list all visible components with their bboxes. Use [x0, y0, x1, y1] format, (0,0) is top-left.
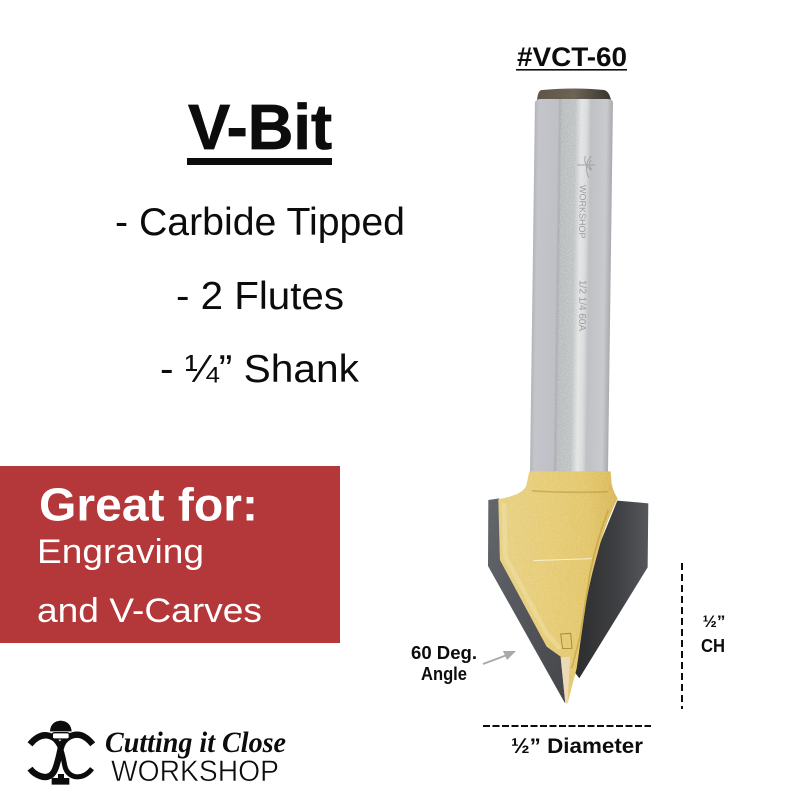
logo icon	[30, 721, 93, 785]
dimension label: half inch CH: ½”	[703, 612, 725, 631]
shank engraving: 1/2 1/4 60A	[576, 280, 588, 331]
right carbide wing	[572, 501, 648, 678]
title: V-Bit: V-Bit	[188, 91, 332, 163]
logo	[30, 721, 286, 788]
gold body	[498, 471, 618, 703]
text: engraving: Engraving	[37, 533, 204, 571]
gold shading	[532, 491, 608, 668]
feature: 2 flutes: - 2 Flutes	[176, 275, 344, 318]
angle label: 60 Deg.	[411, 643, 477, 663]
carbide tip	[561, 657, 570, 703]
heading: great for: Great for:	[39, 478, 258, 530]
dimension label: half inch CH	[701, 612, 725, 656]
dimension line: cutting height	[681, 563, 683, 709]
shank	[530, 88, 613, 473]
angle label: Angle	[421, 664, 467, 684]
feature: carbide tipped: - Carbide Tipped	[115, 201, 405, 244]
dimension label: half inch CH: CH	[701, 636, 725, 656]
arrow: to angle	[483, 651, 516, 664]
logo wordmark: workshop: WORKSHOP	[111, 755, 279, 788]
shank engraving	[575, 156, 595, 331]
left carbide wing	[488, 498, 567, 703]
dimension label: half inch diameter: ½” Diameter	[511, 735, 643, 758]
carbide and gold head	[488, 471, 648, 703]
product code: #VCT-60	[517, 42, 627, 72]
feature: quarter inch shank: - ¼” Shank	[160, 348, 360, 391]
logo wordmark: cutting it close: Cutting it Close	[105, 726, 286, 759]
dimension line: diameter	[483, 725, 651, 727]
angle label	[411, 643, 477, 684]
shank engraving: WORKSHOP	[577, 185, 588, 239]
panel: great for	[0, 466, 340, 643]
text: and v-carves: and V-Carves	[37, 592, 262, 630]
router bit photo illustration	[488, 88, 648, 703]
